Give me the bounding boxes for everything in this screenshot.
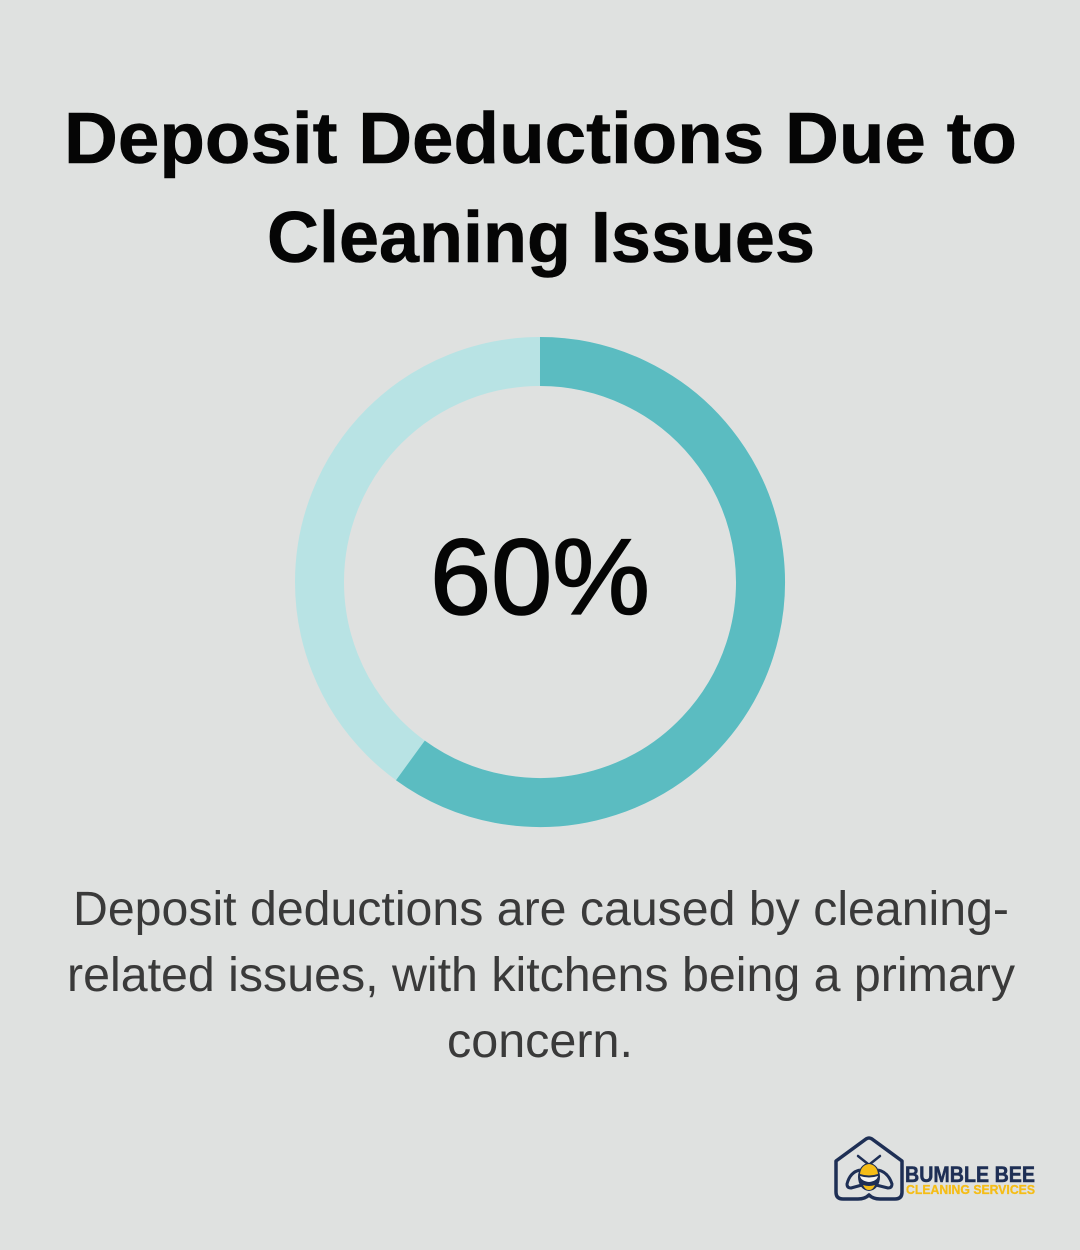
title (64, 99, 1017, 278)
icon: house outline with bee (836, 1138, 902, 1199)
logo: Bumble Bee Cleaning Services (836, 1138, 1035, 1199)
donut chart: 60% (320, 362, 760, 802)
logo name: BUMBLE BEE (905, 1162, 1035, 1187)
center value: 60% (430, 516, 650, 637)
logo tagline: CLEANING SERVICES (906, 1183, 1035, 1197)
description text: Deposit deductions are caused by cleaning- (73, 883, 1009, 936)
title: Deposit Deductions Due to (64, 99, 1017, 179)
description text: concern. (447, 1015, 633, 1068)
title: Cleaning Issues (267, 198, 815, 278)
description text (67, 883, 1015, 1068)
remaining 40% ring segment (320, 362, 760, 802)
description text: related issues, with kitchens being a primary (67, 949, 1015, 1002)
highlighted 60% ring segment (410, 362, 760, 802)
